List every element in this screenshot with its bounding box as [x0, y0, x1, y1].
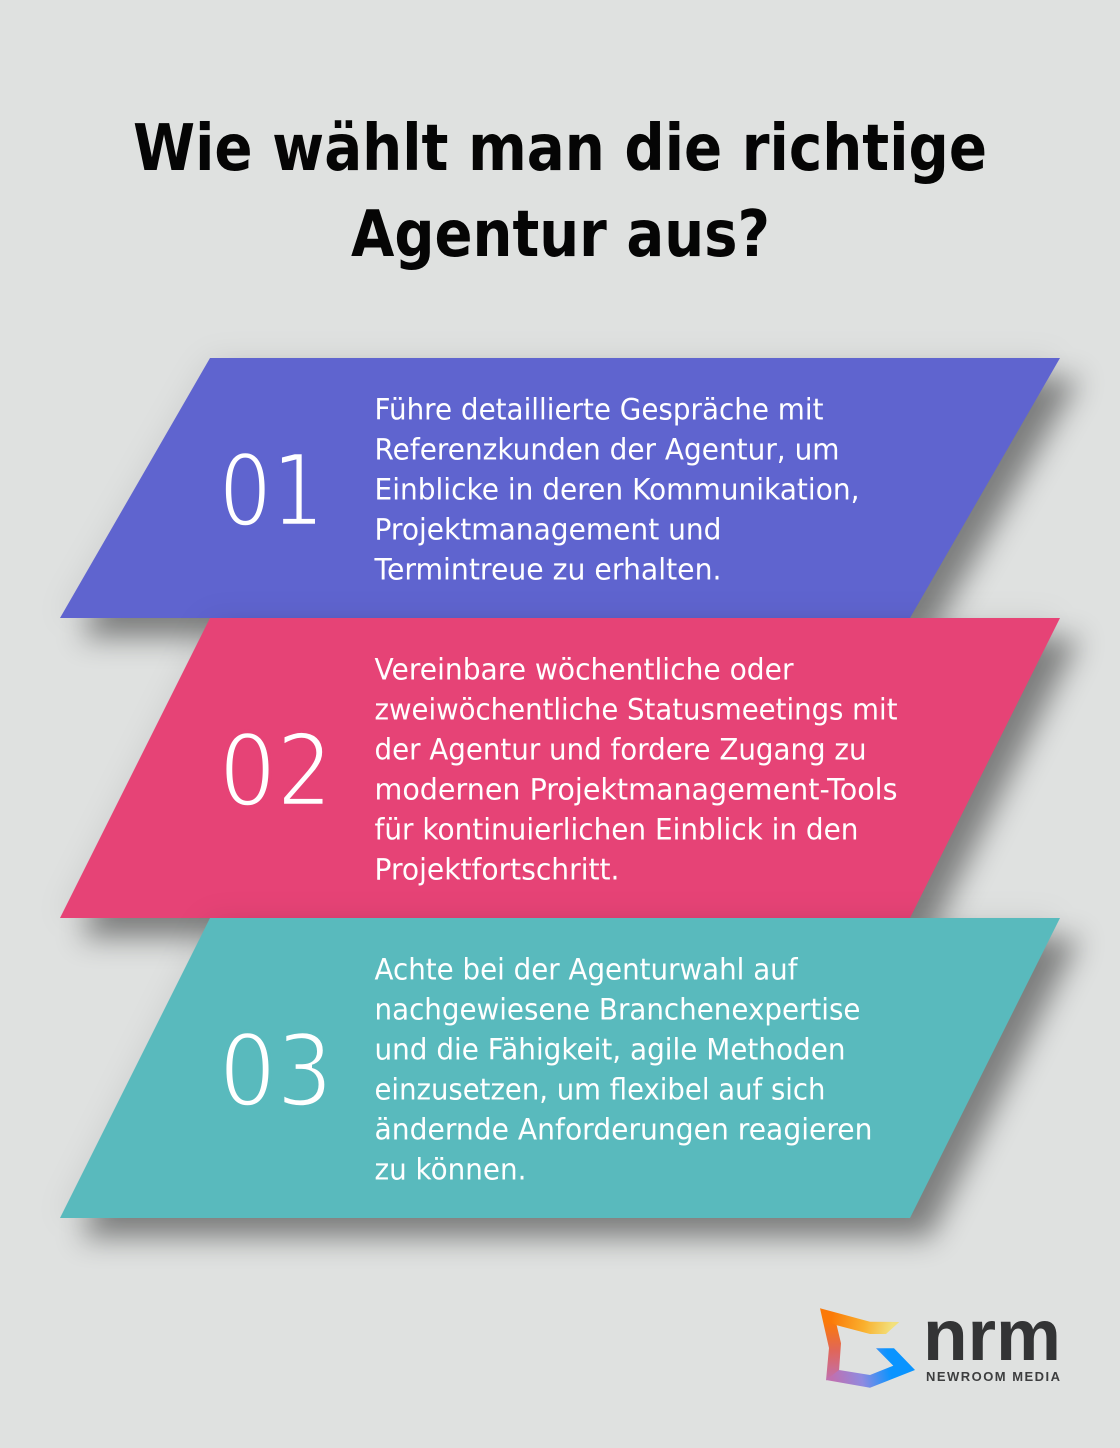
text block 03 [374, 952, 872, 1186]
text block 02: modernen Projektmanagement-Tools [374, 772, 898, 806]
panel: step 01 [60, 358, 1060, 618]
text block 01: Termintreue zu erhalten. [374, 552, 722, 586]
text block 03: und die Fähigkeit, agile Methoden [374, 1032, 846, 1066]
number 02: 02 [219, 712, 333, 830]
text block 01: Projektmanagement und [374, 512, 722, 546]
panel shape 02 [60, 618, 1060, 918]
number 03: 03 [219, 1012, 333, 1130]
text block 02 [374, 652, 898, 886]
text block 03: nachgewiesene Branchenexpertise [374, 992, 860, 1026]
panel: step 02 [60, 618, 1060, 918]
logo tagline: NEWROOM MEDIA [926, 1369, 1061, 1384]
title: Agentur aus? [351, 198, 770, 272]
logo icon [820, 1308, 915, 1388]
number 01: 01 [219, 432, 324, 550]
text block 03: ändernde Anforderungen reagieren [374, 1112, 872, 1146]
logo: newroom media [820, 1296, 1061, 1388]
text block 02: Projektfortschritt. [374, 852, 620, 886]
text block 01: Referenzkunden der Agentur, um [374, 432, 840, 466]
text block 02: für kontinuierlichen Einblick in den [374, 812, 858, 846]
logo wordmark: nrm [923, 1296, 1061, 1376]
panel: step 03 [60, 918, 1060, 1218]
text block 01: Führe detaillierte Gespräche mit [374, 392, 824, 426]
title [133, 112, 987, 272]
title: Wie wählt man die richtige [133, 112, 987, 186]
text block 03: Achte bei der Agenturwahl auf [374, 952, 798, 986]
text block 02: zweiwöchentliche Statusmeetings mit [374, 692, 898, 726]
panel shape 01 [60, 358, 1060, 618]
text block 03: zu können. [374, 1152, 526, 1186]
panel shape 03 [60, 918, 1060, 1218]
text block 02: der Agentur und fordere Zugang zu [374, 732, 866, 766]
text block 01 [374, 392, 860, 586]
text block 01: Einblicke in deren Kommunikation, [374, 472, 860, 506]
text block 02: Vereinbare wöchentliche oder [374, 652, 794, 686]
text block 03: einzusetzen, um flexibel auf sich [374, 1072, 826, 1106]
